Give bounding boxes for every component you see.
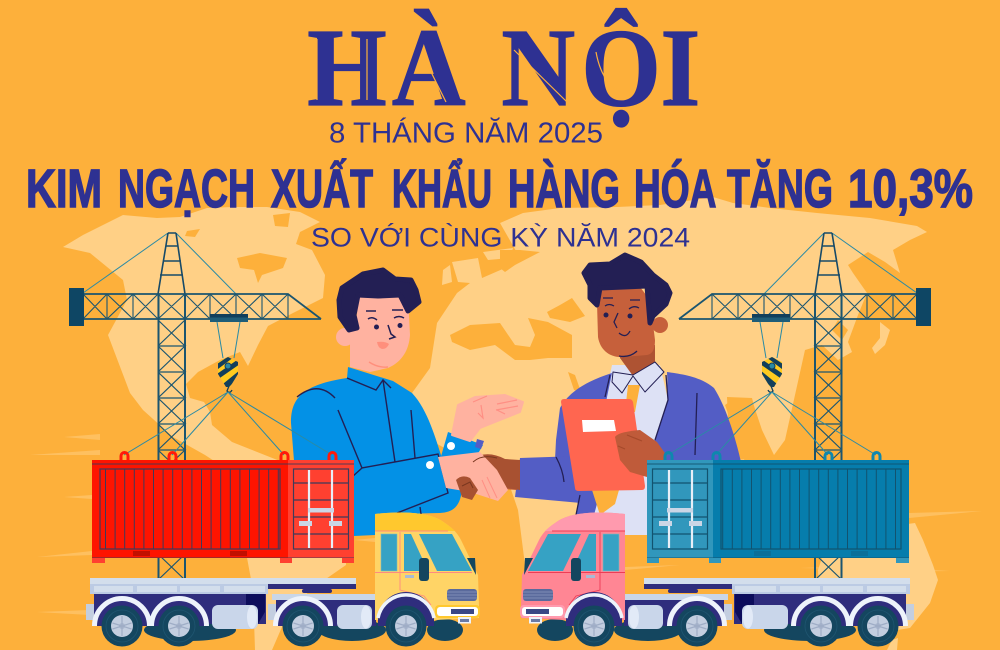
left wrist bbox=[478, 460, 520, 490]
clipboard bbox=[561, 399, 645, 491]
blue container bbox=[647, 453, 909, 563]
hand on clipboard bbox=[615, 430, 667, 477]
right tower crane bbox=[668, 233, 931, 580]
headline: KHẨU bbox=[392, 159, 492, 219]
jacket bbox=[553, 372, 741, 530]
sleeve bbox=[515, 456, 581, 503]
map: inland seas bbox=[185, 213, 848, 460]
clipboard label bbox=[582, 420, 616, 432]
headline: HÓA bbox=[634, 159, 716, 219]
person: left businessman bbox=[291, 270, 523, 536]
neck and face bbox=[350, 297, 410, 372]
headline: XUẤT bbox=[271, 159, 373, 219]
map: light streaks bbox=[30, 434, 982, 615]
neck and face bbox=[620, 345, 655, 376]
map: Japan bbox=[872, 322, 890, 354]
shirt bbox=[291, 367, 462, 536]
world map bbox=[63, 197, 938, 650]
map: North America bbox=[63, 207, 346, 650]
raised arm cuff bbox=[440, 432, 483, 460]
tie bbox=[592, 385, 640, 515]
map: Eurasia and Africa bbox=[412, 197, 927, 590]
headline: NGẠCH bbox=[118, 159, 255, 219]
map: Britain bbox=[442, 265, 452, 285]
headline: KIM bbox=[26, 159, 102, 219]
headline: HÀNG bbox=[508, 159, 620, 219]
pink truck bbox=[520, 512, 914, 646]
collar bbox=[612, 362, 664, 393]
yellow truck bbox=[86, 512, 480, 646]
map: New Zealand bbox=[887, 638, 898, 650]
trousers and shirt bbox=[590, 365, 668, 535]
subheading: comparison: SO VỚI CÙNG KỲ NĂM 2024 bbox=[311, 222, 690, 252]
title: HÀ NỘI bbox=[307, 7, 700, 130]
raised hand bbox=[452, 395, 523, 441]
red container bbox=[92, 453, 354, 563]
headline: TĂNG bbox=[727, 159, 833, 219]
subtitle: period: 8 THÁNG NĂM 2025 bbox=[329, 116, 603, 150]
map: Australia bbox=[818, 515, 938, 632]
left tower crane bbox=[69, 233, 332, 580]
handshake bbox=[438, 452, 520, 501]
headline: 10,3% bbox=[848, 159, 973, 219]
person: right businessman bbox=[478, 255, 741, 535]
map: Iceland bbox=[483, 248, 513, 260]
